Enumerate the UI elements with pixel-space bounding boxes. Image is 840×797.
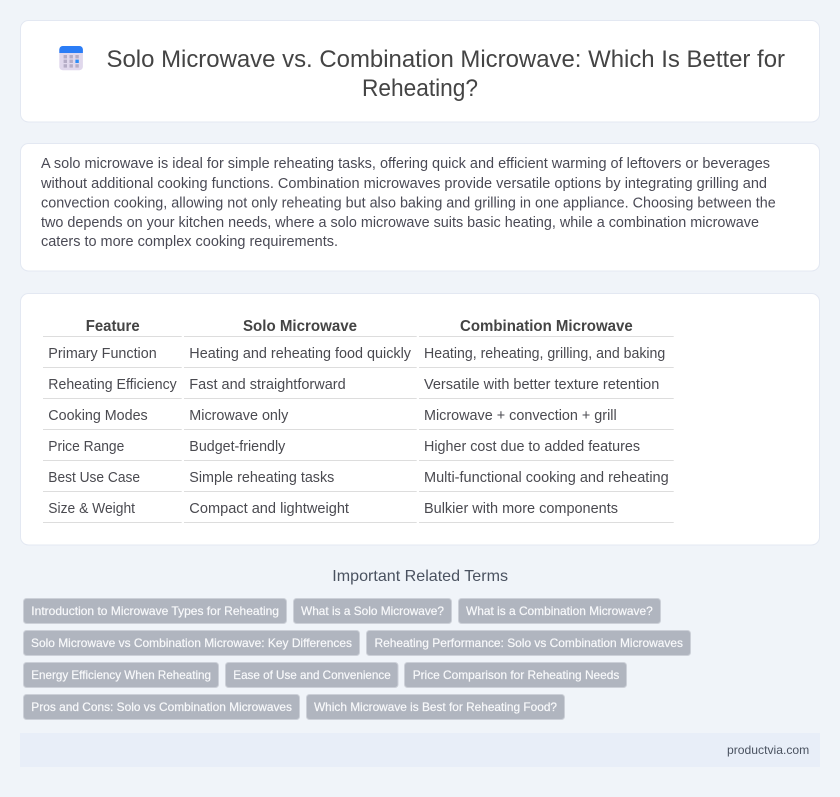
tag: reheating performance <box>366 630 690 656</box>
tag: combination microwave: What is a Combination Microwave? <box>466 604 653 618</box>
tag: combination microwave <box>458 598 660 624</box>
table row: cooking modes <box>48 408 617 424</box>
panel: introduction <box>20 144 820 271</box>
panel: header <box>20 20 820 122</box>
table row: best use case: Simple reheating tasks <box>189 470 334 486</box>
table row: price range: Higher cost due to added features <box>424 439 640 455</box>
title <box>106 46 785 102</box>
table row: cooking modes: Microwave + convection + grill <box>424 408 617 424</box>
table header row <box>86 318 633 335</box>
panel: comparison table <box>20 294 820 545</box>
tag: energy efficiency: Energy Efficiency When Reheating <box>31 668 211 682</box>
table row: size and weight: Compact and lightweight <box>189 501 349 517</box>
tag: introduction: Introduction to Microwave Types for Reheating <box>31 604 279 618</box>
table row: best use case: Multi-functional cooking and reheating <box>424 470 669 486</box>
tag: solo microwave: What is a Solo Microwave? <box>301 604 444 618</box>
table row: reheating efficiency: Reheating Efficiency <box>48 377 177 393</box>
table row: price range: Budget-friendly <box>189 439 286 455</box>
table row: reheating efficiency: Versatile with better texture retention <box>424 377 659 393</box>
related term tags <box>24 598 690 720</box>
tag: price comparison <box>404 662 626 688</box>
tag: ease of use <box>226 662 398 688</box>
tag: price comparison: Price Comparison for Reheating Needs <box>413 668 619 682</box>
tag: reheating performance: Reheating Performance: Solo vs Combination Microwaves <box>374 636 683 650</box>
text block: introduction: two depends on your kitchen needs, where a solo microwave suits basic heating, while a combination microwave <box>41 214 759 231</box>
table row: price range <box>48 439 640 455</box>
table row: primary function: Heating and reheating food quickly <box>189 346 412 362</box>
tag: solo microwave <box>294 598 452 624</box>
footer source text: productvia.com <box>727 743 809 757</box>
title: Solo Microwave vs. Combination Microwave: Which Is Better for <box>106 46 785 73</box>
tag: pros and cons: Pros and Cons: Solo vs Combination Microwaves <box>31 700 292 714</box>
tag: key differences <box>24 630 360 656</box>
text block: introduction: A solo microwave is ideal for simple reheating tasks, offering quick and efficient warming of leftovers or beverages <box>41 155 770 172</box>
table row: size and weight <box>48 501 618 517</box>
text block: introduction: without additional cooking functions. Combination microwaves provide versatile options by integrating grilling and <box>40 175 767 192</box>
text block: introduction: convection cooking, allowing not only reheating but also baking and grilling in one appliance. Choosing between the <box>41 194 776 212</box>
table header row: Feature <box>86 318 140 335</box>
tag: best for reheating: Which Microwave is Best for Reheating Food? <box>314 700 557 714</box>
title: Reheating? <box>362 75 478 102</box>
icon: calendar <box>59 46 83 70</box>
text block: introduction <box>40 155 776 250</box>
table row: primary function <box>48 346 665 362</box>
table row: reheating efficiency: Fast and straightforward <box>189 377 346 393</box>
table row: size and weight: Bulkier with more components <box>424 501 618 517</box>
text block: introduction: caters to more complex cooking requirements. <box>41 233 338 250</box>
tag: pros and cons <box>24 694 300 720</box>
tag: ease of use: Ease of Use and Convenience <box>233 668 391 682</box>
table row: primary function: Primary Function <box>48 346 157 362</box>
table row: primary function: Heating, reheating, grilling, and baking <box>424 346 665 362</box>
tag: energy efficiency <box>24 662 218 688</box>
table row: size and weight: Size & Weight <box>48 501 135 517</box>
table row: best use case: Best Use Case <box>48 470 140 486</box>
table row: cooking modes: Cooking Modes <box>48 408 148 424</box>
tag: introduction <box>24 598 286 624</box>
tag: key differences: Solo Microwave vs Combination Microwave: Key Differences <box>31 636 352 650</box>
footer <box>20 733 820 767</box>
table row: best use case <box>48 470 669 486</box>
heading: important related terms: Important Related Terms <box>332 568 508 585</box>
table row: reheating efficiency <box>48 377 659 393</box>
tag: best for reheating <box>306 694 564 720</box>
table row: cooking modes: Microwave only <box>189 408 289 424</box>
table header row: Solo Microwave <box>243 318 357 335</box>
table header row: Combination Microwave <box>460 318 633 335</box>
table row: price range: Price Range <box>48 439 124 455</box>
